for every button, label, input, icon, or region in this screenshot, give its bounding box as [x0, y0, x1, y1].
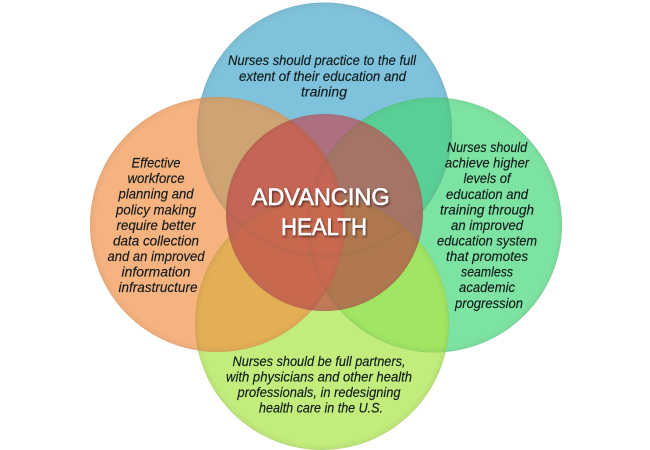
text: left circle: data collection — [113, 232, 199, 248]
text: left circle: policy making — [115, 202, 196, 218]
text: right circle: training through — [440, 202, 534, 218]
overlap: right and bottom — [340, 241, 449, 352]
text: left circle: planning and — [118, 186, 195, 202]
text: right circle: education system — [437, 232, 537, 248]
circle: centre red — [226, 114, 423, 311]
circle: bottom green — [195, 196, 449, 450]
text: left circle: require better — [117, 217, 197, 233]
text: right circle: academic — [459, 279, 515, 295]
text: bottom circle: health care in the U.S. — [259, 400, 383, 416]
text: right circle: an improved — [451, 217, 524, 233]
title: advancing health: HEALTH — [281, 214, 367, 241]
text: bottom circle: professionals, in redesigning — [237, 384, 401, 400]
venn diagram — [90, 2, 562, 450]
overlap: top and left — [197, 97, 290, 211]
rim shading on circles — [90, 2, 562, 450]
text: left circle: infrastructure — [118, 279, 198, 295]
text: bottom circle: Nurses should be full partners, — [233, 353, 406, 369]
circle: top blue — [197, 2, 452, 258]
text: right circle: seamless — [461, 264, 513, 280]
text: right circle: Nurses should — [447, 139, 528, 155]
text: left circle: and an improved — [108, 248, 206, 264]
overlap: left and bottom — [195, 236, 312, 352]
text: bottom circle: with physicians and other health — [226, 368, 412, 384]
circle: right green — [307, 98, 562, 352]
title: advancing health: ADVANCING — [252, 184, 390, 211]
text: right circle: achieve higher — [445, 154, 530, 170]
text: left circle: Effective — [132, 154, 181, 170]
text: right circle: education and — [446, 186, 529, 202]
text: right circle: levels of — [464, 170, 512, 186]
text: right circle: that promotes — [446, 248, 528, 264]
text: left circle: workforce — [128, 170, 185, 186]
circle: left orange — [90, 97, 345, 352]
text: top circle: extent of their education and — [239, 68, 407, 84]
text: top circle: Nurses should practice to the full — [228, 52, 417, 68]
text: left circle: information — [122, 264, 191, 280]
overlap: top and right — [361, 98, 452, 211]
text: top circle: training — [301, 84, 347, 100]
text: right circle: progression — [454, 295, 523, 311]
